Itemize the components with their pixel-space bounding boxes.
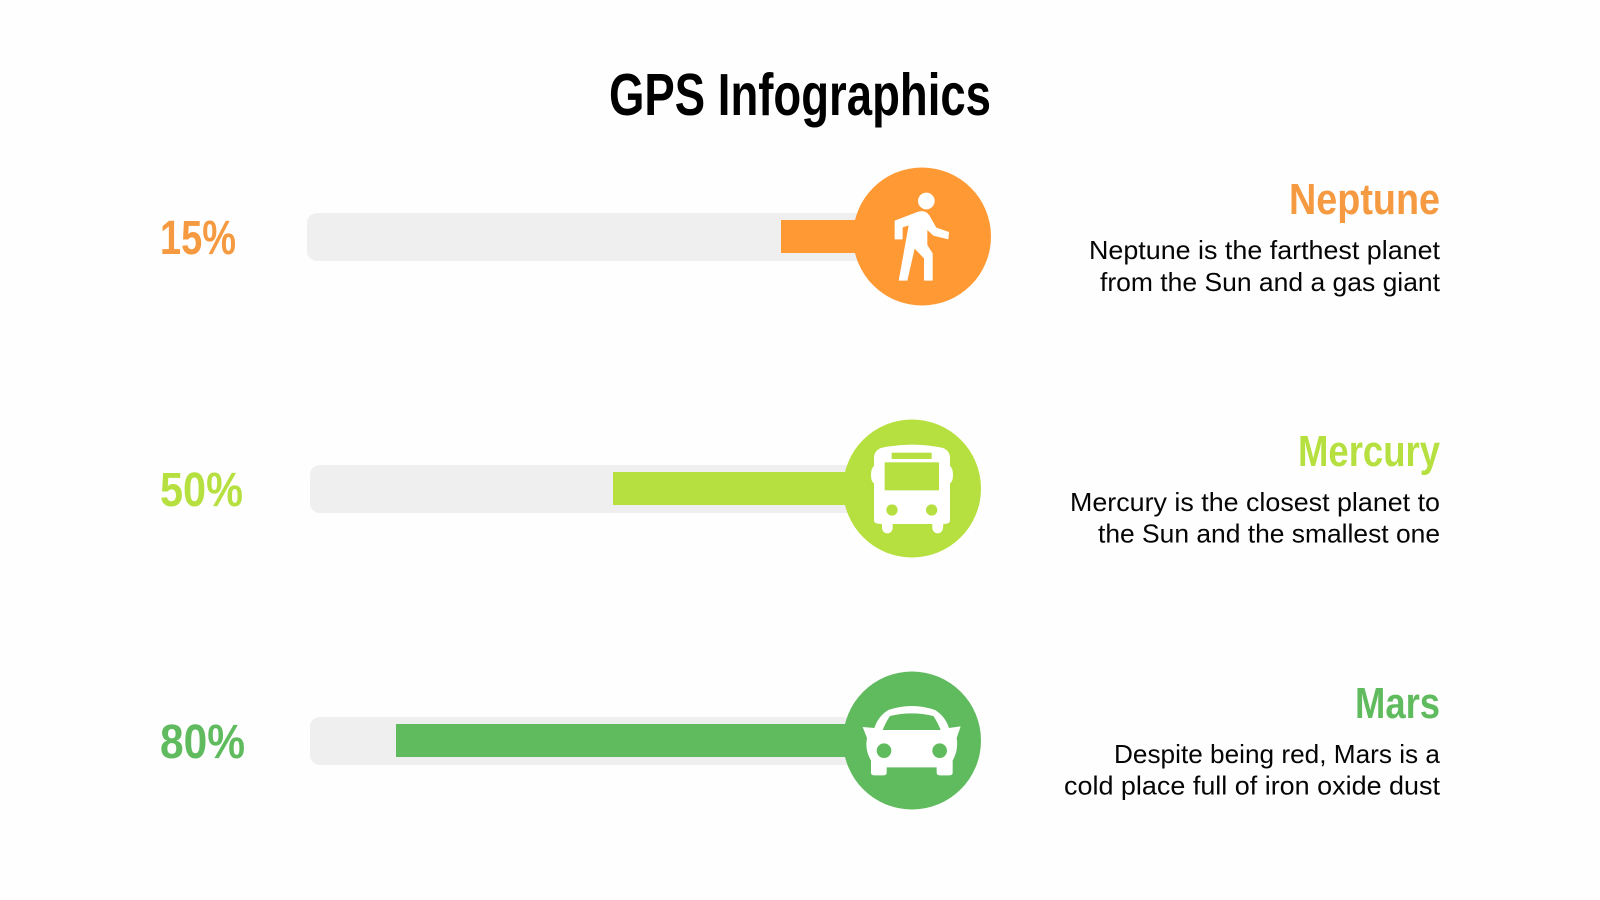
description: Mars: cold place full of iron oxide dust	[1064, 770, 1441, 800]
progress fill	[396, 724, 876, 757]
heading: Mars: Mars	[1355, 679, 1440, 728]
icon: car	[843, 672, 981, 810]
description: Mercury	[1070, 487, 1440, 548]
heading: Neptune: Neptune	[1289, 175, 1440, 224]
progress track	[307, 213, 897, 261]
percentage: 50%: 50%	[160, 464, 243, 517]
progress track	[310, 465, 900, 513]
heading: Mercury: Mercury	[1298, 427, 1440, 476]
progress fill	[781, 220, 881, 253]
description: Neptune: Neptune is the farthest planet	[1089, 235, 1441, 265]
progress track	[310, 717, 900, 765]
progress fill	[613, 472, 873, 505]
description: Mercury: the Sun and the smallest one	[1098, 518, 1440, 548]
description: Mercury: Mercury is the closest planet to	[1070, 487, 1440, 517]
icon: bus	[843, 420, 981, 558]
panel: Mercury row	[160, 420, 1440, 558]
icon: walking person	[853, 168, 991, 306]
panel: Mars row	[160, 672, 1441, 810]
title: GPS Infographics	[609, 62, 991, 128]
description: Neptune	[1089, 235, 1441, 297]
description: Neptune: from the Sun and a gas giant	[1100, 267, 1441, 297]
percentage: 15%: 15%	[160, 212, 236, 265]
panel: Neptune row	[160, 168, 1441, 306]
description: Mars	[1064, 739, 1441, 800]
percentage: 80%: 80%	[160, 716, 245, 769]
description: Mars: Despite being red, Mars is a	[1114, 739, 1441, 769]
